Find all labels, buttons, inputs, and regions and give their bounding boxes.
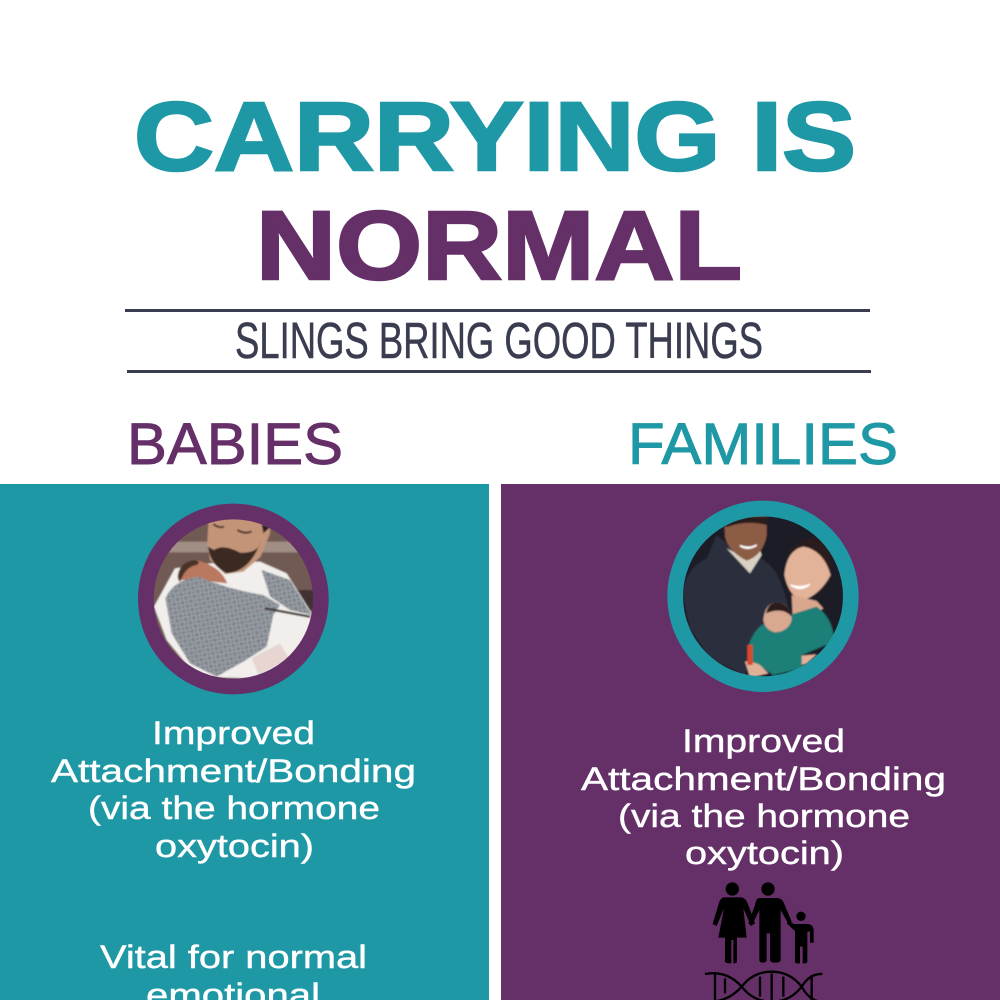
text: improved attachment: Attachment/Bonding	[581, 761, 946, 797]
text: vital for normal emotional	[100, 939, 367, 1000]
text: improved attachment: Improved	[152, 715, 315, 751]
title: CARRYING IS	[134, 82, 856, 191]
title	[134, 82, 856, 300]
icon: child	[787, 912, 814, 963]
text: improved attachment: Attachment/Bonding	[51, 753, 416, 789]
text: improved attachment	[51, 715, 416, 864]
text: improved attachment: oxytocin)	[685, 835, 844, 871]
icon: father	[748, 882, 792, 963]
subtitle with rules	[125, 309, 871, 373]
icon: DNA helix	[705, 972, 822, 1000]
subtitle with rules: SLINGS BRING GOOD THINGS	[235, 312, 763, 369]
text: improved attachment: (via the hormone	[88, 790, 380, 826]
text: improved attachment: (via the hormone	[618, 798, 910, 834]
text: improved attachment: oxytocin)	[155, 828, 314, 864]
text: improved attachment: Improved	[682, 723, 845, 759]
text: improved attachment	[581, 723, 946, 871]
title: NORMAL	[256, 191, 742, 300]
photo: parents with baby in wrap	[667, 501, 859, 692]
icon: family and DNA helix	[705, 882, 822, 1000]
photo: father carrying baby in sling	[138, 504, 329, 694]
heading: babies: BABIES	[127, 412, 343, 477]
icon: mother	[713, 882, 755, 963]
panel: babies	[0, 484, 489, 1000]
heading: families: FAMILIES	[628, 412, 898, 477]
text: vital for normal emotional: Vital for normal	[100, 939, 367, 975]
panel: families	[501, 484, 1000, 1000]
